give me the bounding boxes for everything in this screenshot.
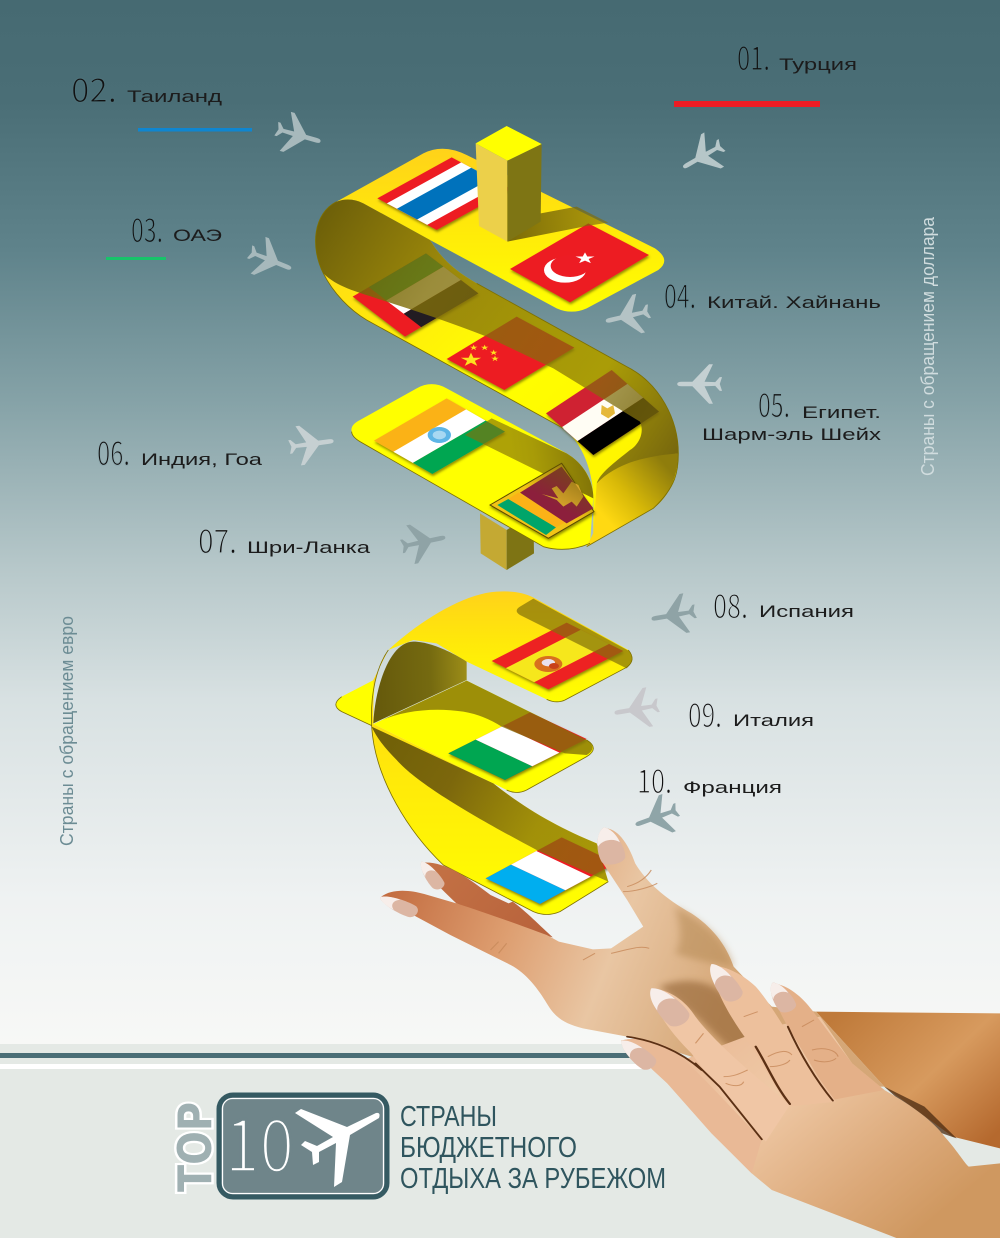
euro top right shadow xyxy=(517,599,632,668)
title: ОТДЫХА ЗА РУБЕЖОМ xyxy=(400,1163,666,1195)
icon: plane Spain xyxy=(648,592,699,638)
footer band xyxy=(0,1044,1000,1238)
upper bar of dollar xyxy=(476,126,542,242)
flag: China xyxy=(447,317,574,390)
side caption: euro countries: Страны с обращением евро xyxy=(57,616,77,846)
finger D xyxy=(773,983,884,1100)
knuckle creases xyxy=(491,870,838,1086)
shadow on bottom panel xyxy=(465,418,593,498)
label 02 Thailand: Таиланд xyxy=(127,87,222,106)
hands xyxy=(376,825,1000,1238)
label 03 UAE: 03. xyxy=(131,204,163,252)
flag: Sri Lanka xyxy=(490,463,594,538)
label 06 India Goa: 06. xyxy=(97,427,130,475)
euro inner loop xyxy=(373,642,467,723)
icon: plane India xyxy=(286,421,336,467)
upper hand xyxy=(381,828,884,1087)
label 03 UAE xyxy=(106,204,222,260)
icon: plane UAE xyxy=(242,233,299,287)
flag: blue white red xyxy=(486,837,616,904)
label 09 Italy: Италия xyxy=(733,711,814,730)
finger A xyxy=(621,1039,762,1173)
finger B xyxy=(651,989,790,1142)
flag: Italy xyxy=(448,712,587,780)
lower right corner shading xyxy=(587,453,678,547)
label 05 Egypt Sharm: Египет. xyxy=(802,403,881,422)
euro middle shadow xyxy=(373,681,592,755)
ribbon outer edges xyxy=(316,202,678,549)
icon: plane Egypt xyxy=(677,364,722,404)
title xyxy=(400,1101,666,1195)
label 07 Sri Lanka xyxy=(198,515,371,563)
title: БЮДЖЕТНОГО xyxy=(400,1132,577,1164)
label 01 Turkey: 01. xyxy=(737,32,770,80)
label 09 Italy xyxy=(688,689,814,737)
nails xyxy=(376,825,799,1073)
thumb shading xyxy=(675,907,734,967)
ribbon band xyxy=(316,200,678,547)
shadow of the dollar bar xyxy=(507,207,608,242)
label 08 Spain: Испания xyxy=(759,602,854,621)
icon: plane Sri Lanka xyxy=(397,518,449,566)
label 10 France: 10. xyxy=(637,755,672,803)
lower stub of dollar bar xyxy=(480,513,534,570)
finger C xyxy=(712,965,836,1107)
flag: India xyxy=(374,398,505,474)
flag: UAE xyxy=(353,253,478,337)
logo TOP 10 xyxy=(168,1087,387,1197)
title: СТРАНЫ xyxy=(400,1101,497,1133)
label 04 China Hainan: 04. xyxy=(664,270,696,318)
top panel xyxy=(337,149,664,312)
icon: plane China xyxy=(601,292,654,340)
label 02 Thailand: 02. xyxy=(71,64,117,112)
label 09 Italy: 09. xyxy=(688,689,722,737)
flag: Turkey xyxy=(510,223,649,302)
lower hand back xyxy=(621,1017,1000,1238)
bottom panel xyxy=(351,384,593,549)
flag: Spain xyxy=(492,623,623,689)
icon: plane Italy xyxy=(611,686,662,732)
back surface of ribbon xyxy=(316,200,678,483)
shadow behind lower fingers xyxy=(659,981,772,1073)
flag: Egypt xyxy=(546,370,659,455)
arm xyxy=(816,1012,1000,1148)
label 08 Spain xyxy=(713,580,854,628)
number 10: 10 xyxy=(225,1087,294,1194)
label 03 UAE: ОАЭ xyxy=(173,226,222,245)
euro left bump xyxy=(336,679,375,726)
label 06 India Goa xyxy=(97,427,263,475)
flag: Thailand xyxy=(377,157,511,230)
euro outer edges xyxy=(336,650,632,914)
label 05 Egypt Sharm: Шарм-эль Шейх xyxy=(702,425,882,444)
label 08 Spain: 08. xyxy=(713,580,748,628)
TOP rotated text: TOP xyxy=(168,1102,222,1192)
label 05 Egypt Sharm: 05. xyxy=(758,379,790,427)
icon: plane Thailand xyxy=(271,109,326,161)
euro sweep shadow xyxy=(372,727,608,882)
label 07 Sri Lanka: Шри-Ланка xyxy=(247,538,371,557)
label 04 China Hainan: Китай. Хайнань xyxy=(707,293,881,312)
label 07 Sri Lanka: 07. xyxy=(198,515,237,563)
label 02 Thailand xyxy=(71,64,252,132)
label 04 China Hainan xyxy=(664,270,881,318)
euro sign ribbon with flags xyxy=(336,591,632,914)
finger gaps xyxy=(627,1027,833,1139)
side caption: dollar countries: Страны с обращением доллара xyxy=(918,216,938,476)
second finger of upper hand xyxy=(422,863,553,937)
euro sweep xyxy=(371,650,608,914)
icon: logo plane xyxy=(295,1109,380,1187)
label 01 Turkey: Турция xyxy=(779,55,857,74)
label 01 Turkey xyxy=(674,32,857,107)
icon: plane France xyxy=(629,791,684,843)
label 10 France: Франция xyxy=(683,778,782,797)
label 10 France xyxy=(637,755,782,803)
arm shadow xyxy=(884,1087,957,1138)
dollar sign ribbon with flags xyxy=(316,126,678,570)
rounded logo box xyxy=(219,1095,387,1197)
icon: plane Turkey xyxy=(673,128,732,185)
label 05 Egypt Sharm xyxy=(702,379,882,444)
euro top panel xyxy=(388,591,632,702)
euro middle panel xyxy=(373,681,593,792)
label 06 India Goa: Индия, Гоа xyxy=(141,450,263,469)
